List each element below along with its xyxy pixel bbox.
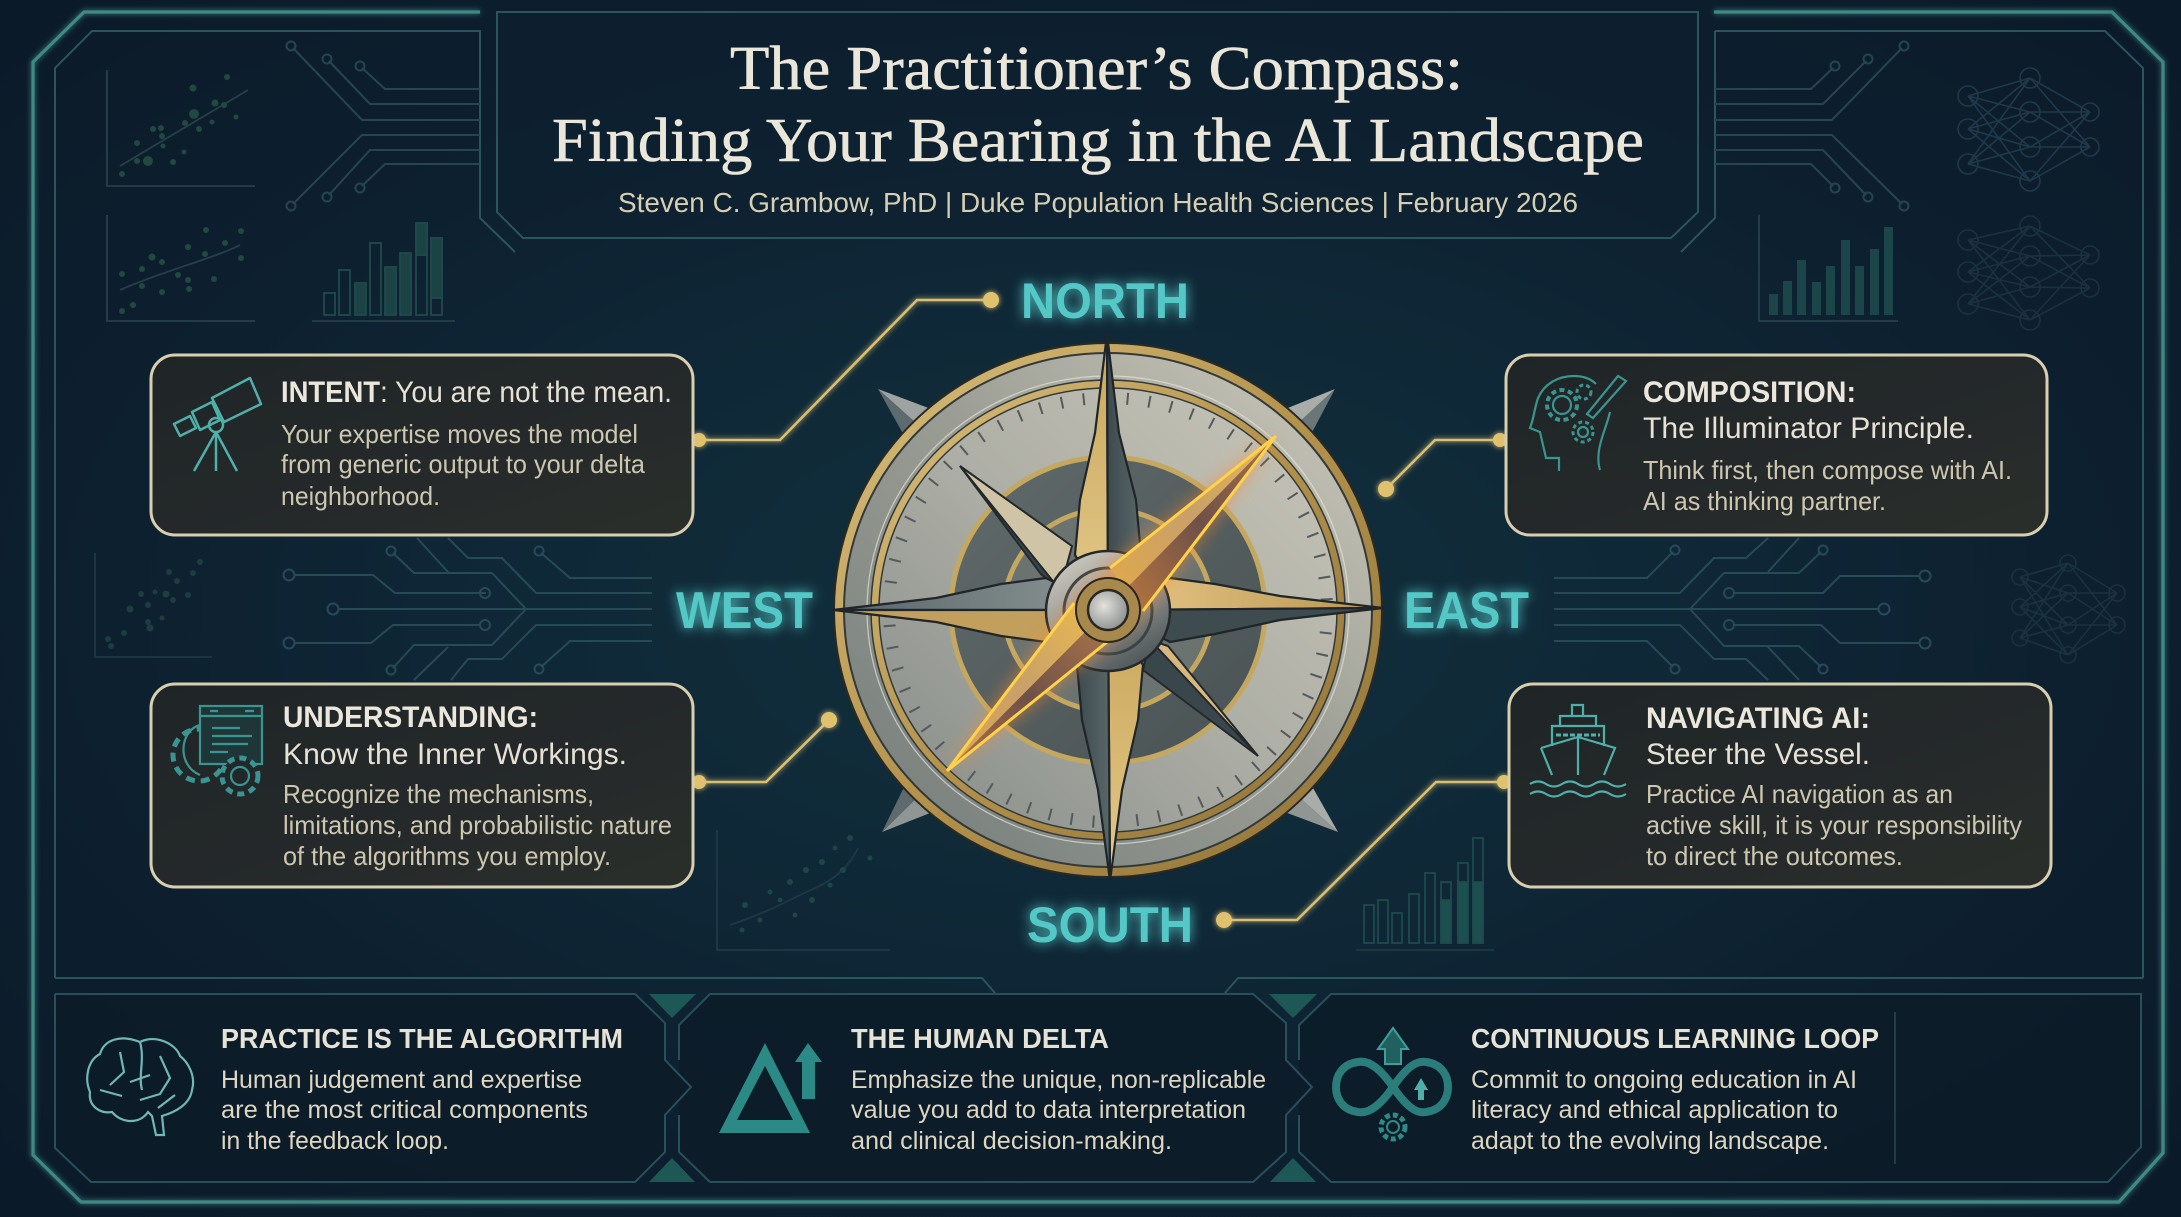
label EAST: EAST xyxy=(1404,582,1529,640)
body text: AI as thinking partner. xyxy=(1643,486,1886,516)
compass xyxy=(833,334,1383,881)
label NORTH: NORTH xyxy=(1021,273,1189,329)
decoration: top-left bar chart xyxy=(312,223,455,321)
decoration: top-right circuit lines xyxy=(1715,42,1908,210)
compass main star xyxy=(833,334,1383,881)
heading: COMPOSITION: xyxy=(1643,376,1856,409)
icon: head with gears and pencil xyxy=(1530,376,1626,471)
panel: intent xyxy=(151,355,693,535)
compass hub xyxy=(1046,551,1170,671)
inner frame lines xyxy=(55,31,2143,993)
compass outer spikes xyxy=(878,389,1338,832)
bottom band shapes xyxy=(55,994,2141,1182)
body text: in the feedback loop. xyxy=(221,1127,449,1155)
title line 1: The Practitioner’s Compass: xyxy=(730,35,1463,103)
icon: ship and waves xyxy=(1530,705,1626,796)
decoration: top-left scatter plots xyxy=(107,70,255,321)
bottom separator triangles xyxy=(649,994,1317,1182)
icon: brain xyxy=(87,1038,193,1135)
panel: continuous learning loop xyxy=(1336,1012,1895,1164)
panel: understanding xyxy=(151,684,693,887)
compass centre cap xyxy=(1076,578,1140,642)
body text: and clinical decision-making. xyxy=(851,1127,1172,1155)
decoration: bottom bar chart xyxy=(1356,838,1494,950)
body text: to direct the outcomes. xyxy=(1646,841,1903,871)
body text xyxy=(221,1066,588,1155)
body text: active skill, it is your responsibility xyxy=(1646,810,2022,840)
title line 2: Finding Your Bearing in the AI Landscape xyxy=(552,107,1644,175)
heading: THE HUMAN DELTA xyxy=(851,1023,1109,1054)
heading: CONTINUOUS LEARNING LOOP xyxy=(1471,1023,1879,1054)
body text: value you add to data interpretation xyxy=(851,1096,1246,1124)
label WEST: WEST xyxy=(676,582,813,640)
body text: Practice AI navigation as an xyxy=(1646,779,1953,809)
body text: Your expertise moves the model xyxy=(281,419,638,449)
heading: UNDERSTANDING: xyxy=(283,701,538,734)
body text: from generic output to your delta xyxy=(281,449,646,479)
icon: telescope xyxy=(174,378,261,471)
title panel xyxy=(497,12,1698,238)
decoration: neural network lower xyxy=(2012,555,2125,663)
compass needle xyxy=(947,436,1276,771)
decoration: neural network middle xyxy=(1958,216,2099,330)
subheading: Steer the Vessel. xyxy=(1646,738,1870,771)
subheading: Know the Inner Workings. xyxy=(283,738,627,771)
icon: delta and arrow xyxy=(719,1043,822,1133)
body text: Commit to ongoing education in AI xyxy=(1471,1066,1857,1094)
body text xyxy=(1646,779,2022,871)
label SOUTH: SOUTH xyxy=(1027,897,1193,953)
body text xyxy=(281,419,646,511)
body text: Think first, then compose with AI. xyxy=(1643,455,2012,485)
heading: INTENT xyxy=(281,376,380,409)
body text: of the algorithms you employ. xyxy=(283,841,611,871)
panel: navigating AI xyxy=(1509,684,2051,887)
body text: Recognize the mechanisms, xyxy=(283,779,594,809)
body text: Emphasize the unique, non-replicable xyxy=(851,1066,1266,1094)
body text: literacy and ethical application to xyxy=(1471,1096,1838,1124)
decoration: left middle scatter xyxy=(95,553,212,657)
decoration: bottom scatter xyxy=(717,830,890,950)
decoration: top-right bar chart xyxy=(1759,215,1898,321)
compass diagonal points xyxy=(960,466,1258,756)
body text: neighborhood. xyxy=(281,481,440,511)
body text xyxy=(851,1066,1266,1155)
heading rest: : You are not the mean. xyxy=(380,376,672,409)
panel: the human delta xyxy=(719,1023,1266,1155)
subheading: The Illuminator Principle. xyxy=(1643,412,1974,445)
body text: limitations, and probabilistic nature xyxy=(283,810,672,840)
subtitle: Steven C. Grambow, PhD | Duke Population Health Sciences | February 2026 xyxy=(618,187,1578,218)
body text xyxy=(283,779,672,871)
body text xyxy=(1643,455,2012,516)
heading: PRACTICE IS THE ALGORITHM xyxy=(221,1023,623,1054)
leader lines xyxy=(692,292,1511,928)
decoration: right middle circuit lines xyxy=(1554,538,1930,680)
body text: adapt to the evolving landscape. xyxy=(1471,1127,1829,1155)
icon: infinity loop, arrow and gear xyxy=(1336,1028,1448,1139)
decoration: top-left circuit lines xyxy=(286,42,480,210)
body text xyxy=(1471,1066,1857,1155)
compass rings and dial xyxy=(834,343,1382,877)
heading: NAVIGATING AI: xyxy=(1646,702,1870,735)
decoration: neural network top xyxy=(1958,68,2099,191)
panel: practice is the algorithm xyxy=(87,1023,623,1155)
panel: composition xyxy=(1506,355,2047,535)
body text: are the most critical components xyxy=(221,1096,588,1124)
decoration: left middle circuit lines xyxy=(284,538,652,680)
body text: Human judgement and expertise xyxy=(221,1066,582,1094)
icon: gears and code window xyxy=(173,706,262,794)
